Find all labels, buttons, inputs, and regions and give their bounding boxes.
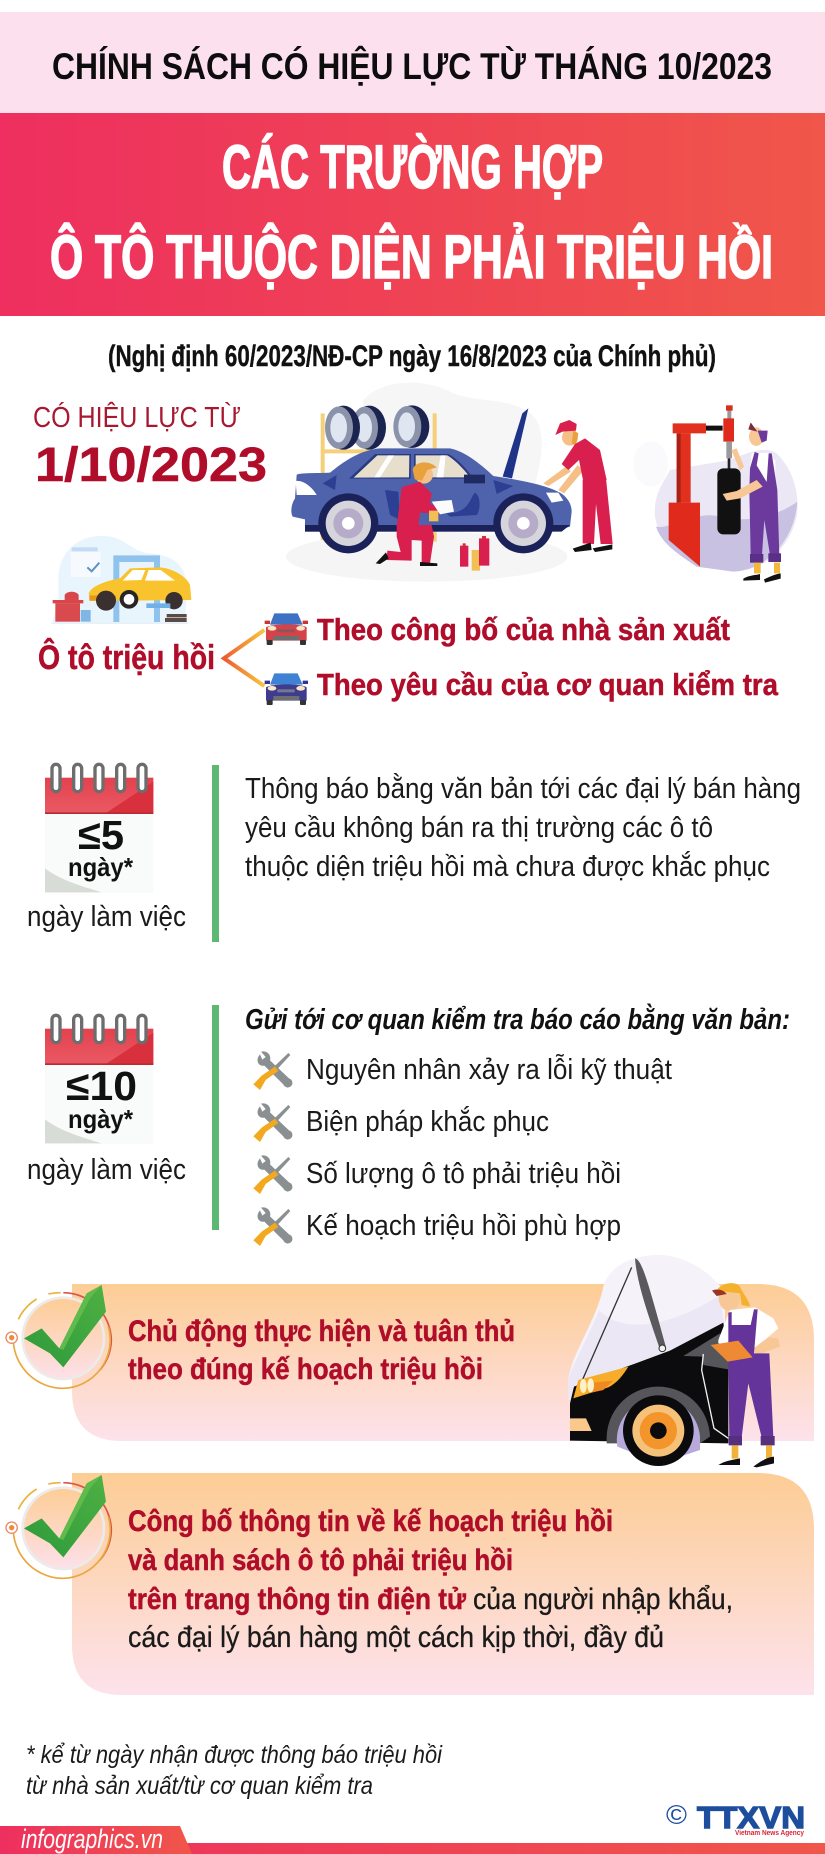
- panel 1 text: Chủ động thực hiện và tuân thủ: [128, 1315, 515, 1348]
- footnote: từ nhà sản xuất/từ cơ quan kiểm tra: [26, 1772, 373, 1800]
- report items: Số lượng ô tô phải triệu hồi: [306, 1158, 621, 1190]
- report items: [253, 1051, 672, 1246]
- calendar: at most 5 days: ≤5: [78, 812, 124, 858]
- report items: Biện pháp khắc phục: [306, 1105, 549, 1138]
- label: recalled cars: Ô tô triệu hồi: [38, 638, 215, 677]
- calendar: at most 10 days: ngày*: [68, 1104, 134, 1134]
- logo: TTXVN: Vietnam News Agency: [735, 1830, 804, 1837]
- recall sources list: Theo yêu cầu của cơ quan kiểm tra: [317, 667, 779, 702]
- caption: working days: ngày làm việc: [27, 1154, 186, 1186]
- panel 1 text: theo đúng kế hoạch triệu hồi: [128, 1353, 483, 1386]
- icon: tools 1: [253, 1051, 292, 1090]
- title banner: CÁC TRƯỜNG HỢP: [222, 133, 603, 201]
- report items: Kế hoạch triệu hồi phù hợp: [306, 1210, 621, 1242]
- icon: tools 4: [253, 1207, 292, 1246]
- report items: Nguyên nhân xảy ra lỗi kỹ thuật: [306, 1053, 672, 1086]
- illustration: yellow car on lift: [52, 536, 191, 624]
- effective date block: CÓ HIỆU LỰC TỪ: [33, 401, 241, 434]
- recall sources list: [317, 612, 779, 702]
- green divider 2: [212, 1005, 219, 1230]
- icon: tools 2: [253, 1103, 292, 1142]
- title banner: [0, 113, 825, 316]
- panel 2 text: của người nhập khẩu,: [473, 1583, 733, 1616]
- illustration: mechanics repairing blue car: [286, 383, 613, 582]
- calendar: at most 10 days: ≤10: [66, 1063, 137, 1109]
- footnote: [26, 1741, 443, 1800]
- effective date block: [33, 401, 267, 492]
- panel 2 text: và danh sách ô tô phải triệu hồi: [128, 1544, 513, 1577]
- icon: red car: [265, 613, 308, 645]
- logo: TTXVN: [666, 1800, 805, 1837]
- icon: tools 3: [253, 1155, 292, 1194]
- illustration: worker with tyre machine: [633, 405, 797, 583]
- effective date block: 1/10/2023: [35, 439, 267, 492]
- green divider 1: [212, 765, 219, 942]
- calendar: at most 5 days: [45, 764, 153, 893]
- calendar: at most 5 days: ngày*: [68, 852, 134, 882]
- panel 1 text: [128, 1315, 515, 1386]
- logo: TTXVN: ©: [666, 1800, 687, 1830]
- panel 2 text: trên trang thông tin điện tử: [128, 1583, 466, 1616]
- notice text: yêu cầu không bán ra thị trường các ô tô: [245, 812, 713, 844]
- icon: check mark 2: [6, 1475, 111, 1578]
- illustration: mechanic inspecting black car: [568, 1255, 780, 1467]
- recall sources list: Theo công bố của nhà sản xuất: [317, 612, 730, 647]
- footnote: * kể từ ngày nhận được thông báo triệu hồi: [26, 1741, 443, 1769]
- footer bar: infographics.vn: [21, 1824, 163, 1854]
- notice text: [245, 772, 801, 883]
- icon: blue car: [265, 673, 308, 705]
- panel 2 text: [128, 1505, 733, 1654]
- panel 2 text: các đại lý bán hàng một cách kịp thời, đầy đủ: [128, 1621, 664, 1654]
- panel: publish information: [72, 1473, 814, 1695]
- branch arrow: [224, 630, 264, 686]
- notice text: thuộc diện triệu hồi mà chưa được khắc phục: [245, 850, 770, 883]
- caption: working days: ngày làm việc: [27, 901, 186, 933]
- icon: check mark 1: [6, 1285, 111, 1388]
- logo: TTXVN: TTXVN: [697, 1800, 805, 1835]
- footer bar: [0, 1824, 825, 1854]
- calendar: at most 10 days: [45, 1015, 153, 1144]
- panel 2 text: Công bố thông tin về kế hoạch triệu hồi: [128, 1505, 613, 1538]
- panel: comply with the plan: [72, 1284, 814, 1441]
- header band: effective date: [0, 12, 825, 114]
